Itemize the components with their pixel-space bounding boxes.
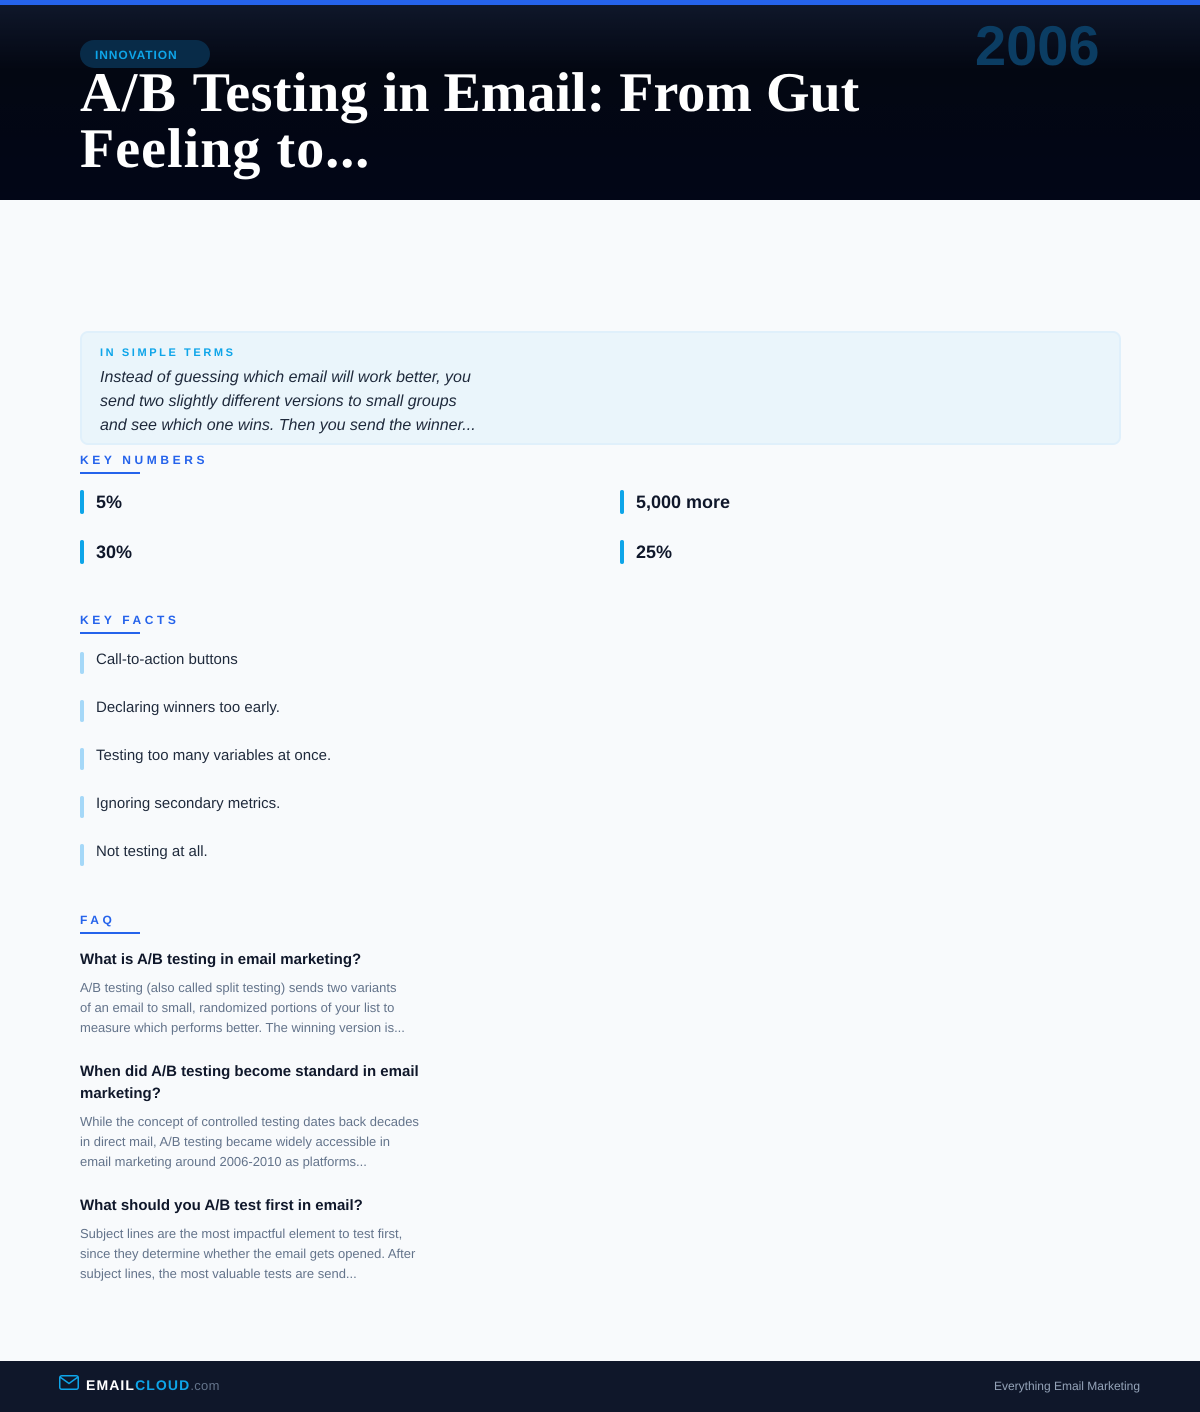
stat: 30% [80,540,132,564]
stat: 5% [80,490,122,514]
panel text: send two slightly different versions to small groups [100,393,457,410]
stat: 30%: 30% [96,542,132,562]
question 2: marketing? [80,1085,161,1102]
answer 3: Subject lines are the most impactful element to test first, [80,1226,402,1241]
stat: 5,000 more: 5,000 more [636,492,730,512]
year watermark: 2006 [975,14,1100,77]
question 1: What is A/B testing in email marketing? [80,951,361,968]
stat: 25% [620,540,672,564]
heading: key numbers: KEY NUMBERS [80,453,208,467]
answer 1: of an email to small, randomized portions of your list to [80,1000,394,1015]
fact 3: Testing too many variables at once. [96,747,331,764]
heading: FAQ: FAQ [80,913,115,927]
badge label: INNOVATION [95,48,178,62]
fact 2: Declaring winners too early. [96,699,280,716]
title [80,62,860,180]
answer 2: While the concept of controlled testing dates back decades [80,1114,419,1129]
panel text [100,369,476,434]
stat: 25%: 25% [636,542,672,562]
footer [0,1361,1200,1412]
fact 4: Ignoring secondary metrics. [96,795,280,812]
answer 1 [80,980,405,1035]
header band [0,0,1200,200]
question 2 [80,1063,419,1102]
fact 5: Not testing at all. [96,843,208,860]
top accent bar [0,0,1200,5]
answer 3: since they determine whether the email gets opened. After [80,1246,415,1261]
answer 3: subject lines, the most valuable tests are send... [80,1266,357,1281]
answer 2 [80,1114,419,1169]
panel text: and see which one wins. Then you send the winner... [100,417,476,434]
footer tagline: Everything Email Marketing [994,1379,1140,1393]
title: Feeling to... [80,118,370,180]
answer 2: in direct mail, A/B testing became widely accessible in [80,1134,390,1149]
icon: envelope [59,1375,79,1390]
answer 1: A/B testing (also called split testing) sends two variants [80,980,396,995]
heading: key facts: KEY FACTS [80,613,180,627]
answer 3 [80,1226,416,1281]
panel label: IN SIMPLE TERMS [100,347,236,359]
title: A/B Testing in Email: From Gut [80,62,859,124]
fact 1: Call-to-action buttons [96,651,238,668]
footer logo: EMAILCLOUD.com [86,1377,220,1393]
question 2: When did A/B testing become standard in email [80,1063,419,1080]
panel: in simple terms [80,331,1121,445]
answer 2: email marketing around 2006-2010 as platforms... [80,1154,367,1169]
category badge [80,40,210,68]
panel text: Instead of guessing which email will work better, you [100,369,471,386]
question 3: What should you A/B test first in email? [80,1197,363,1214]
answer 1: measure which performs better. The winning version is... [80,1020,405,1035]
stat: 5%: 5% [96,492,122,512]
